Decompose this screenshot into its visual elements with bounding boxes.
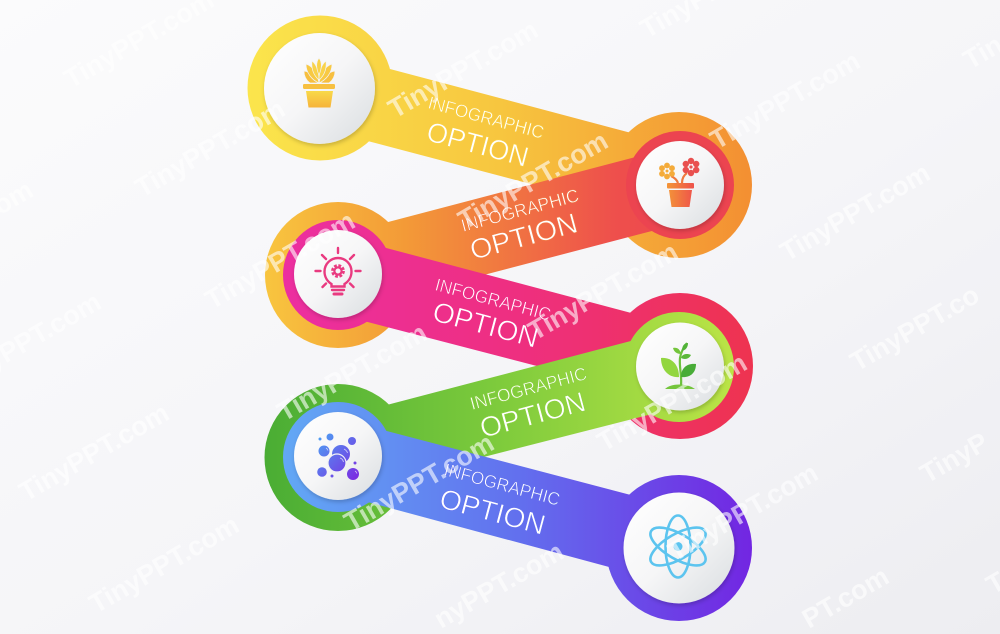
icon: potted succulent <box>303 58 335 108</box>
panel: option 3 pink link <box>283 220 753 439</box>
white disc 4 <box>636 322 724 410</box>
icon: bubbles <box>317 434 359 480</box>
text: option 2 label: INFOGRAPHIC <box>459 185 581 236</box>
icon: atom <box>645 516 711 578</box>
watermark: repeated TinyPPT.com: TinyPPT.com <box>272 317 432 427</box>
watermark: repeated TinyPPT.com: TinyPPT.com <box>453 125 613 235</box>
watermark: repeated TinyPPT.com: TinyPPT.com <box>592 347 752 457</box>
panel: option 5 blue link <box>283 402 752 621</box>
text: option 3 label: OPTION <box>429 296 542 354</box>
panel: option 4 green link <box>264 312 734 531</box>
watermark: repeated TinyPPT.com: TinyPPT.com <box>84 509 244 619</box>
text: option 1 label <box>423 93 546 173</box>
text: option 3 label: INFOGRAPHIC <box>433 275 553 325</box>
text: option 1 label: OPTION <box>423 116 532 173</box>
watermark: repeated TinyPPT.com: TinyPPT.com <box>383 14 543 124</box>
text: option 5 label: INFOGRAPHIC <box>442 460 562 510</box>
text: option 4 label: INFOGRAPHIC <box>468 363 589 414</box>
text: option 4 label: OPTION <box>477 386 589 444</box>
watermark: repeated TinyPPT.com: TinyPPT.com <box>14 397 174 507</box>
icon: potted flowers <box>659 158 699 207</box>
white disc 1 <box>264 33 375 144</box>
text: option 3 label <box>429 275 553 354</box>
watermark: repeated TinyPPT.com: TinyPPT.co <box>845 279 984 377</box>
text: option 2 label: OPTION <box>467 207 581 266</box>
watermark: repeated TinyPPT.com: TinyPPT.com <box>523 236 683 346</box>
icon: light bulb with gear <box>316 248 360 294</box>
watermark: repeated TinyPPT.com: TinyPPT.com <box>705 45 865 155</box>
text: option 5 label <box>436 460 562 541</box>
watermark: repeated TinyPPT.com: TinyPPT.com <box>775 157 935 267</box>
panel: option 2 orange link <box>265 131 734 348</box>
watermark: repeated TinyPPT.com: PT.com <box>797 561 894 634</box>
watermark: repeated TinyPPT.com: TinyPPT.com <box>200 205 360 315</box>
icon: sprout <box>661 343 696 389</box>
watermark: repeated TinyPPT.com: nyPPT.com <box>429 536 569 634</box>
text: option 2 label <box>459 185 581 266</box>
text: option 5 label: OPTION <box>436 483 549 541</box>
text: option 1 label: INFOGRAPHIC <box>426 93 546 143</box>
watermark: repeated TinyPPT.com: TinyPPT.com <box>339 427 499 537</box>
watermark: repeated TinyPPT.com: TinyP <box>915 427 993 489</box>
panel: option 1 yellow link <box>248 16 752 258</box>
text: option 4 label <box>468 363 589 444</box>
white disc 2 <box>636 141 724 229</box>
watermark: repeated TinyPPT.com: TinyPPT.com <box>663 457 823 567</box>
white disc 3 <box>294 230 382 318</box>
watermark: repeated TinyPPT.com: TinyPPT.com <box>130 93 290 203</box>
white disc 6 <box>624 492 734 604</box>
white disc 5 <box>294 412 382 500</box>
